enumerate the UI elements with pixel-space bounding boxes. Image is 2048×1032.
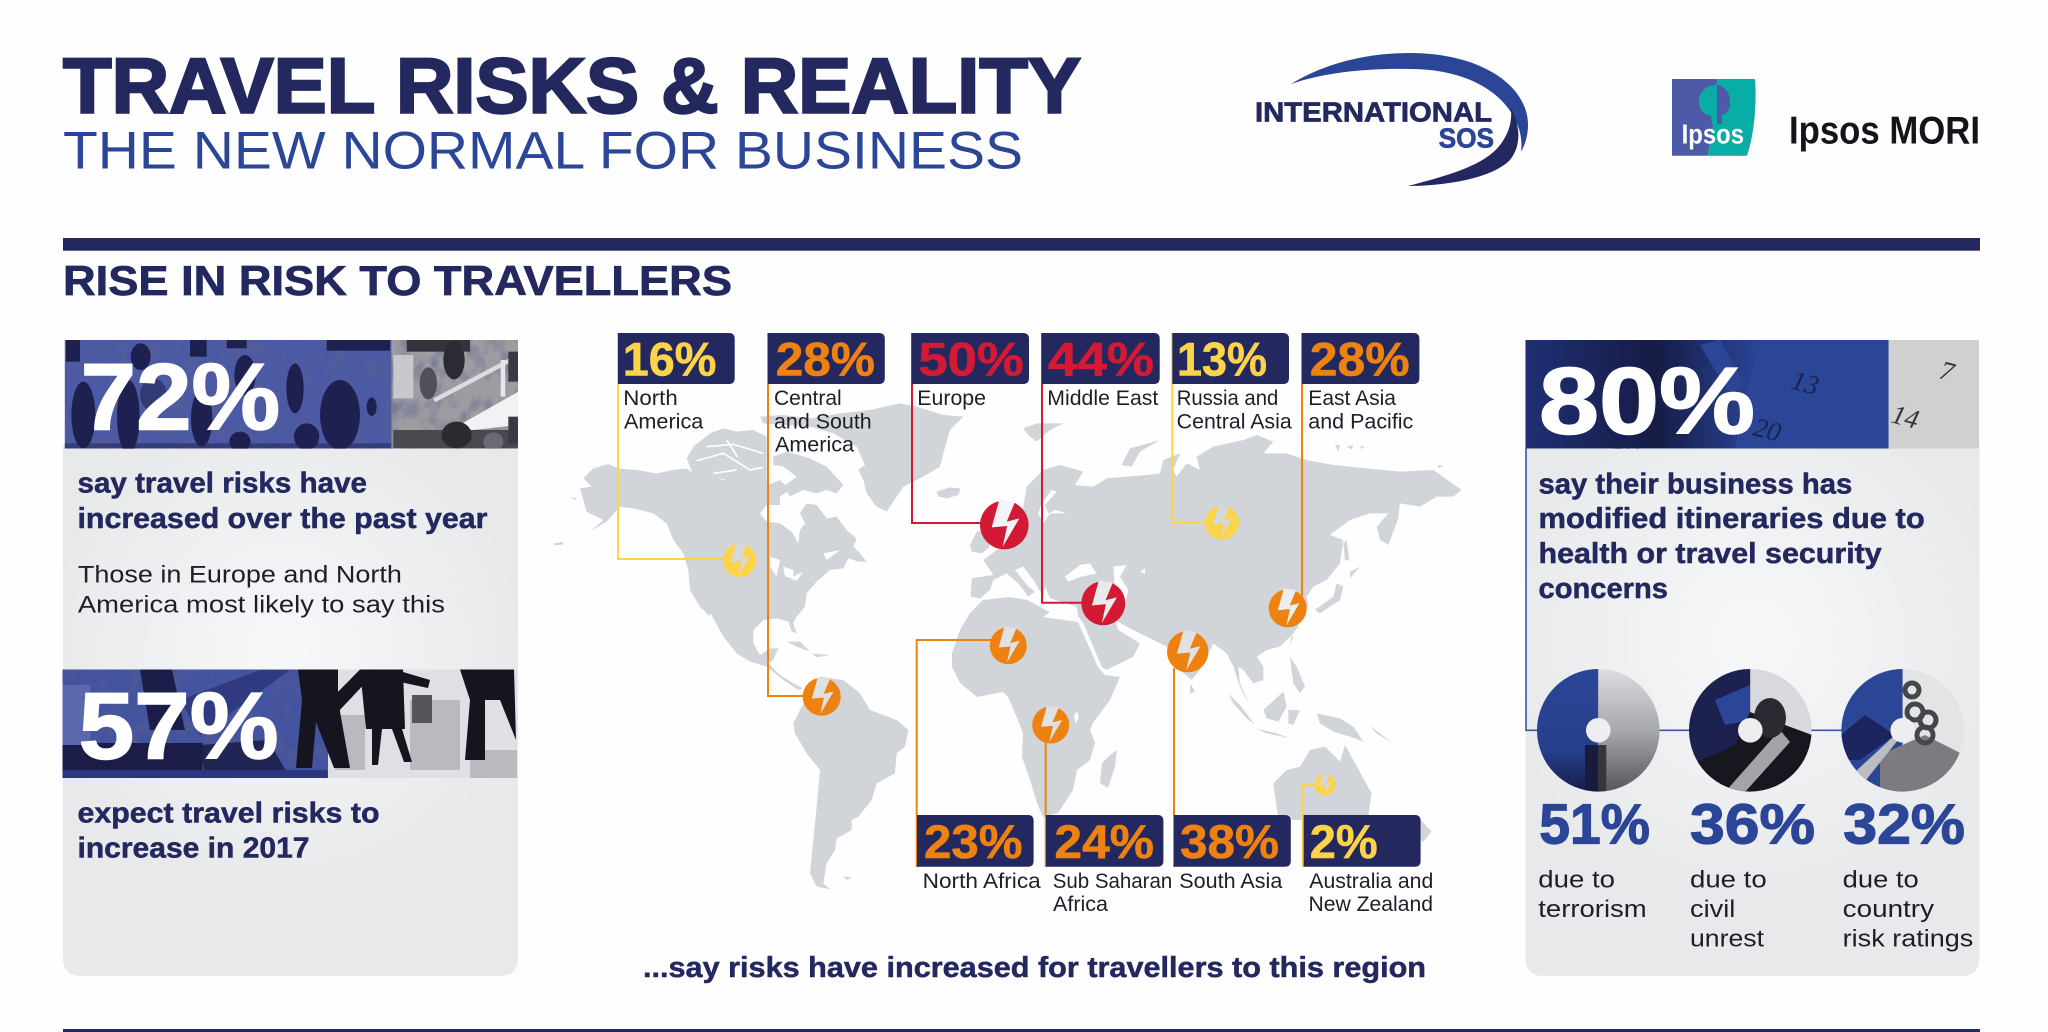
connector line to reasons (1526, 448, 1850, 730)
text: 80% description: health or travel security (1538, 538, 1882, 570)
section heading: RISE IN RISK TO TRAVELLERS (63, 257, 732, 304)
callout: Central and South America 28%: and South (774, 410, 872, 433)
text: 72% description: increased over the past year (78, 503, 488, 535)
stat: 32% due to country risk ratings: risk ratings (1843, 925, 1973, 952)
subtitle: THE NEW NORMAL FOR BUSINESS (63, 121, 1023, 180)
text: 57% description (78, 797, 380, 864)
logo: Ipsos MORI wordmark: Ipsos MORI (1789, 109, 1980, 152)
callout: Australia and New Zealand 2%: New Zealand (1308, 893, 1433, 916)
callout: Russia and Central Asia 13%: Central Asia (1177, 410, 1292, 433)
panel: left statistics (62, 340, 518, 976)
callout: East Asia and Pacific 28%: East Asia (1308, 387, 1396, 410)
stat: 72%: 72% (81, 344, 280, 450)
top divider bar (63, 238, 1980, 251)
photo banner: crowd (65, 340, 518, 453)
stat: 51% due to terrorism: due to (1538, 867, 1615, 894)
pin: South Asia (1167, 630, 1208, 672)
pin: North Africa (990, 626, 1027, 664)
pin: Europe (980, 499, 1029, 549)
pin: North America (723, 543, 756, 577)
text: 57% description: expect travel risks to (78, 797, 380, 829)
calendar numbers: 20 (1750, 412, 1785, 448)
main title: TRAVEL RISKS & REALITY (63, 41, 1081, 129)
pin: Central and South America (803, 677, 841, 716)
logo: International SOS: INTERNATIONAL (1255, 97, 1492, 128)
callout: Central and South America 28% (768, 333, 885, 457)
title block (63, 41, 1081, 180)
pin: Russia and Central Asia (1205, 505, 1239, 540)
logo: International SOS (1255, 53, 1528, 186)
calendar numbers: 7 (1936, 355, 1959, 388)
text: regional note: America most likely to say this (78, 591, 445, 618)
callout: Sub Saharan Africa 24% (1046, 815, 1172, 916)
callout: Middle East 44%: 44% (1048, 333, 1154, 386)
calendar numbers (1612, 362, 1956, 449)
stat: 51% due to terrorism: terrorism (1538, 896, 1647, 923)
text: regional note: Those in Europe and North (78, 562, 402, 589)
text: 80% description: concerns (1538, 573, 1668, 605)
callout: Central and South America 28%: 28% (776, 333, 875, 386)
callout: Middle East 44% (1042, 333, 1160, 410)
callout: Australia and New Zealand 2%: Australia and (1309, 870, 1433, 893)
callout: North America 16%: North (623, 387, 678, 410)
stat: 57%: 57% (79, 674, 279, 780)
text: 80% description: say their business has (1538, 469, 1852, 501)
text: 72% description (78, 468, 488, 535)
logo: Ipsos: Ipsos (1682, 118, 1744, 149)
callout: Russia and Central Asia 13% (1172, 333, 1292, 433)
donut: civil unrest (1689, 669, 1812, 792)
text: 72% description: say travel risks have (78, 468, 367, 500)
callout: North Africa 23% (917, 815, 1041, 893)
pin: Sub Saharan Africa (1032, 706, 1069, 744)
callout: East Asia and Pacific 28%: 28% (1310, 333, 1410, 386)
stat: 36% due to civil unrest: due to (1690, 867, 1767, 894)
callout: North America 16%: America (624, 410, 704, 433)
donut: country risk ratings (1841, 669, 1964, 792)
photo banner: calendar (1525, 340, 1979, 461)
callout: Australia and New Zealand 2%: 2% (1310, 815, 1378, 868)
callout: Middle East 44%: Middle East (1047, 387, 1158, 410)
stat: 32% due to country risk ratings: 32% (1843, 792, 1965, 856)
stat: 51% due to terrorism (1538, 792, 1650, 923)
callout: Central and South America 28%: Central (774, 387, 842, 410)
map caption: ...say risks have increased for travellers to this region (643, 952, 1426, 984)
callout: North America 16%: 16% (623, 333, 716, 386)
panel: right statistics (1525, 340, 1980, 976)
callout: Russia and Central Asia 13%: 13% (1177, 333, 1267, 386)
callout: Australia and New Zealand 2% (1304, 815, 1433, 916)
logo: International SOS: SOS (1439, 122, 1494, 153)
calendar numbers: 14 (1888, 399, 1922, 435)
callout: Europe 50%: 50% (918, 333, 1024, 386)
stat: 36% due to civil unrest (1690, 792, 1815, 952)
connector lines (618, 333, 1318, 867)
stat: 80%: 80% (1539, 349, 1755, 455)
text: 80% description (1538, 469, 1925, 605)
logo: Ipsos (1672, 79, 1756, 156)
text: 80% description: modified itineraries due to (1538, 503, 1925, 535)
callout: North Africa 23%: 23% (924, 815, 1022, 868)
calendar numbers: 26 (1610, 425, 1645, 461)
pin: Middle East (1081, 580, 1125, 625)
callout: South Asia 38%: South Asia (1179, 870, 1283, 893)
callout: Central and South America 28%: America (775, 434, 854, 457)
stat: 32% due to country risk ratings: due to (1843, 867, 1919, 894)
bottom divider bar (63, 1029, 1980, 1032)
stat: 36% due to civil unrest: civil (1690, 896, 1735, 923)
photo banner: tightrope (62, 670, 517, 778)
stat: 51% due to terrorism: 51% (1539, 792, 1650, 856)
calendar numbers: 13 (1788, 365, 1822, 401)
callout: East Asia and Pacific 28%: and Pacific (1308, 410, 1413, 433)
callout: Sub Saharan Africa 24%: 24% (1054, 815, 1154, 868)
world map (553, 403, 1462, 889)
callout: Europe 50% (912, 333, 1029, 410)
callout: South Asia 38% (1174, 815, 1291, 893)
callout: North Africa 23%: North Africa (923, 870, 1041, 893)
pin: Australia and New Zealand (1314, 773, 1336, 795)
stat: 36% due to civil unrest: 36% (1690, 792, 1815, 856)
callout: Sub Saharan Africa 24%: Sub Saharan (1053, 870, 1172, 893)
donut: terrorism (1537, 669, 1660, 792)
stat: 32% due to country risk ratings (1843, 792, 1973, 952)
pin: East Asia and Pacific (1269, 588, 1307, 627)
stat: 32% due to country risk ratings: country (1843, 896, 1934, 923)
callout: Russia and Central Asia 13%: Russia and (1177, 387, 1278, 410)
text: regional note (78, 562, 445, 618)
callout: North America 16% (618, 333, 735, 433)
callout: Europe 50%: Europe (917, 387, 986, 410)
stat: 36% due to civil unrest: unrest (1690, 925, 1764, 952)
callout: East Asia and Pacific 28% (1302, 333, 1419, 433)
text: 57% description: increase in 2017 (78, 832, 310, 864)
callout: South Asia 38%: 38% (1180, 815, 1279, 868)
callout: Sub Saharan Africa 24%: Africa (1053, 893, 1108, 916)
